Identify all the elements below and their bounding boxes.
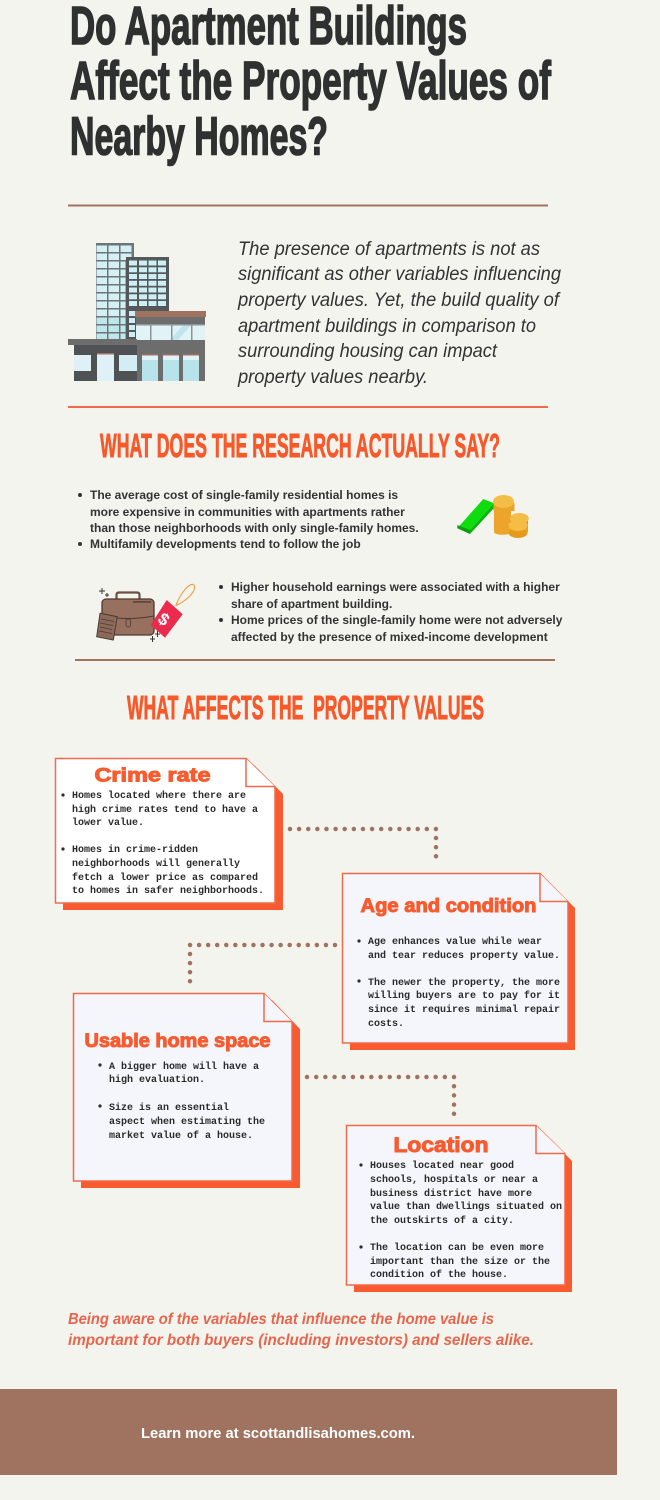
intro text: property values nearby. [237, 367, 428, 388]
intro text [237, 239, 561, 388]
card bullets: condition of the house. [370, 1269, 508, 1281]
card heading: Usable home space [84, 1030, 271, 1052]
icon: briefcase and price tag: $ [154, 609, 173, 630]
title [70, 0, 552, 166]
card bullets: willing buyers are to pay for it [368, 990, 560, 1002]
research bullets 1: than those neighborhoods with only single-family homes. [90, 521, 419, 535]
card bullets: aspect when estimating the [109, 1116, 265, 1128]
panel: usable home space [74, 994, 300, 1188]
card bullets: high evaluation. [109, 1074, 205, 1086]
card bullets: costs. [368, 1019, 404, 1030]
card bullets [357, 936, 560, 1030]
card bullets: Age enhances value while wear [368, 936, 542, 948]
card bullets: neighborhoods will generally [72, 858, 240, 870]
research bullets 1: The average cost of single-family residential homes is [90, 488, 398, 502]
card bullets: Houses located near good [370, 1160, 514, 1172]
footer banner: Learn more at scottandlisahomes.com. [141, 1426, 415, 1442]
research bullets 2: affected by the presence of mixed-income development [231, 630, 548, 644]
research bullets 2 [219, 580, 563, 644]
card bullets: business district have more [370, 1188, 532, 1200]
card bullets: Size is an essential [109, 1102, 229, 1114]
footer banner [0, 1389, 617, 1475]
research bullets 2: Higher household earnings were associated with a higher [231, 580, 560, 594]
card bullets: since it requires minimal repair [368, 1004, 560, 1016]
card bullets: A bigger home will have a [109, 1061, 259, 1073]
intro text: significant as other variables influencing [238, 264, 561, 285]
card heading: Crime rate [94, 764, 211, 786]
card bullets: to homes in safer neighborhoods. [72, 885, 264, 897]
dotted connector: usable space to location [307, 1077, 454, 1115]
research bullets 2: Home prices of the single-family home were not adversely [231, 613, 563, 627]
card bullets: Homes located where there are [72, 790, 246, 802]
research bullets 1 [78, 488, 419, 551]
intro text: apartment buildings in comparison to [238, 316, 536, 337]
research bullets 1: more expensive in communities with apartments rather [90, 505, 405, 519]
dotted connector: age to usable space [190, 945, 335, 985]
dotted connector: crime to age [290, 829, 436, 865]
card bullets [61, 790, 264, 897]
card bullets: high crime rates tend to have a [72, 804, 258, 816]
closing statement: Being aware of the variables that influence the home value is [68, 1311, 494, 1328]
intro text: property values. Yet, the build quality of [237, 290, 561, 311]
card bullets: value than dwellings situated on [370, 1201, 562, 1213]
card bullets: the outskirts of a city. [370, 1215, 514, 1227]
closing statement: important for both buyers (including investors) and sellers alike. [68, 1332, 534, 1349]
card bullets: Homes in crime-ridden [72, 844, 198, 856]
card bullets: lower value. [72, 817, 144, 829]
title: Nearby Homes? [70, 106, 328, 166]
card bullets: important than the size or the [370, 1256, 550, 1268]
icon: money and coins [457, 495, 529, 538]
icon: briefcase and price tag [97, 584, 195, 642]
panel: age and condition [342, 874, 575, 1050]
card bullets [359, 1160, 562, 1281]
card bullets [98, 1061, 265, 1142]
card bullets: market value of a house. [109, 1130, 253, 1142]
intro text: surrounding housing can impact [238, 341, 498, 362]
card heading: Age and condition [360, 895, 536, 917]
research bullets 1: Multifamily developments tend to follow the job [90, 537, 361, 551]
card bullets: The location can be even more [370, 1242, 544, 1254]
card bullets: schools, hospitals or near a [370, 1174, 538, 1186]
card bullets: The newer the property, the more [368, 977, 560, 989]
intro text: The presence of apartments is not as [238, 239, 540, 260]
panel: crime rate [56, 758, 283, 910]
card bullets: and tear reduces property value. [368, 950, 560, 962]
card heading: Location [394, 1134, 488, 1157]
card bullets: fetch a lower price as compared [72, 872, 258, 884]
research bullets 2: share of apartment building. [231, 597, 392, 611]
icon: apartment building [68, 243, 206, 381]
panel: location [346, 1126, 572, 1292]
closing statement [68, 1311, 534, 1349]
